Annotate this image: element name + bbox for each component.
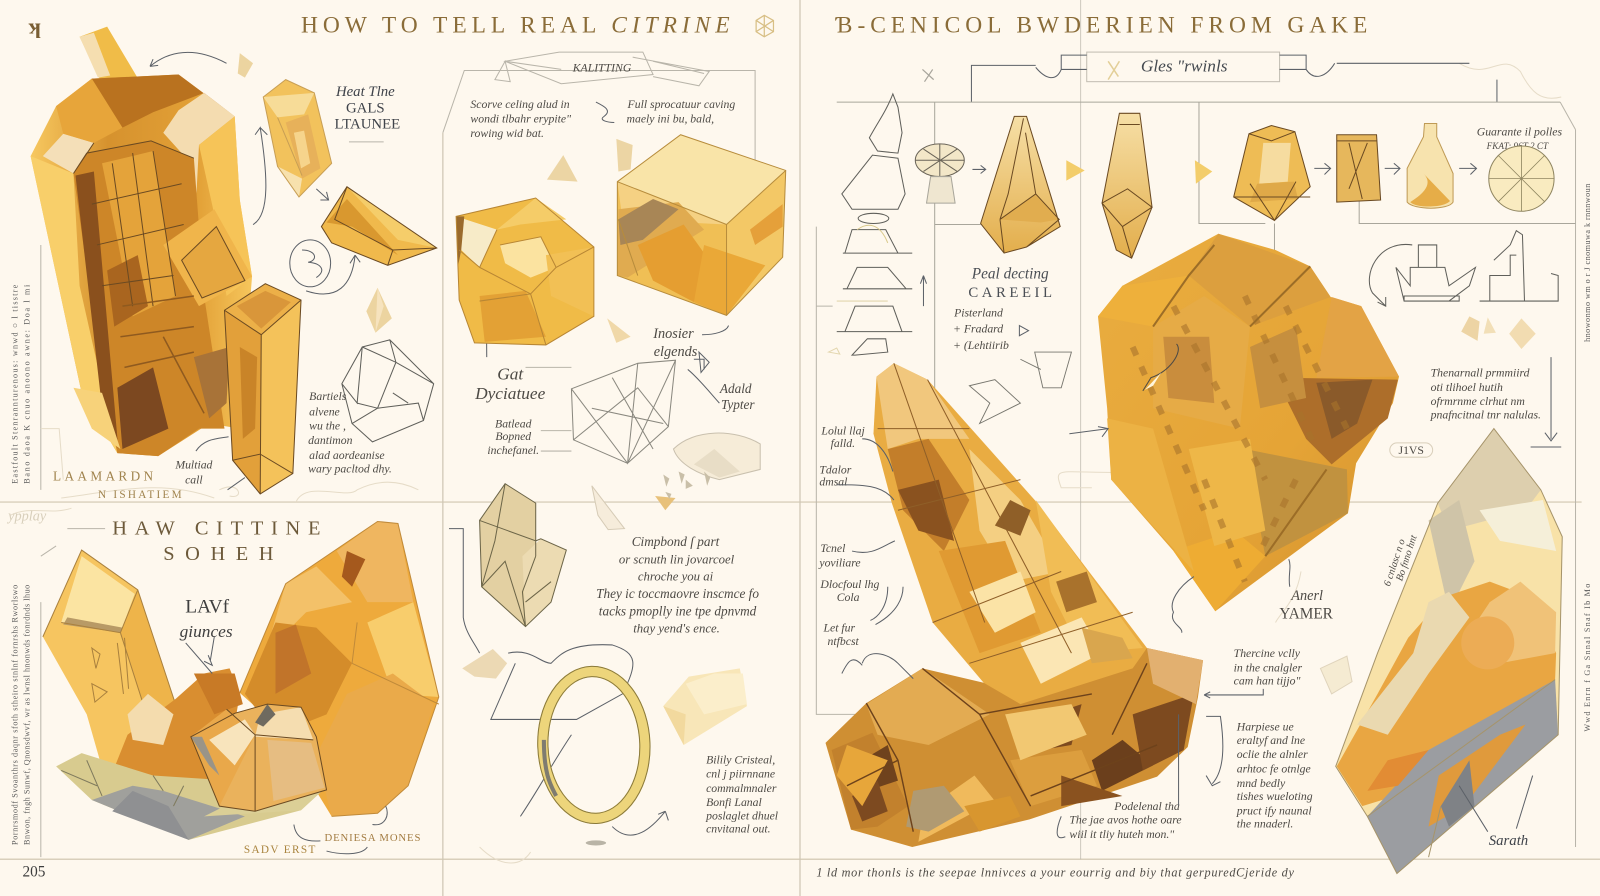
vertical margin text: upper left: Bano daoa K cnuo anoono awne: Doa l mi [23,284,32,484]
crystal: open cube [617,135,786,315]
text: anerl yamer: Anerl [1290,588,1323,604]
text: peal detting careful: Peal decting [971,266,1049,283]
text: billy crystal note: poslaglet dhuel [705,809,778,822]
text: heat time label: Heat Tlne [335,84,395,100]
text: lavf giunces: giunces [180,622,233,641]
sketch: pale rough stone and chips [663,433,760,499]
text: peal detting careful: Pisterland [953,306,1003,319]
vertical margin text: right [1583,184,1592,732]
text: gat dyciatnee: Gat [497,365,524,384]
vertical margin text: lower left [10,585,32,845]
text: peal detting careful: + (Lehtiirib [953,339,1009,352]
label: hivs tag: J1VS [1399,444,1424,457]
arrows: gem row [972,163,1477,175]
text: gat dyciatnee [474,365,546,403]
crystal: main tall citrine cluster [31,27,252,456]
crystal: beige twin stones [480,484,566,627]
text: lamardn caption [53,469,182,501]
vertical margin text: right: hnowonmo wm o r J cnomuwa k rnnnwoun [1583,184,1592,342]
right large crystal [240,521,439,816]
text: gat dyciatnee: Dyciatuee [474,384,546,403]
centre crystals [107,668,240,806]
arrow: into central crystal [1069,427,1108,437]
text: harpiese note: mnd bedly [1237,777,1286,790]
labels: cone callouts [818,425,913,679]
text: compound paragraph: Cimpbond ſ part [632,534,720,549]
header box: gles rwinls: Gles "rwinls [1141,56,1228,75]
text: compound paragraph: thay yend's ence. [633,622,720,636]
vertical margin text: lower left: Pornrsmodf Svoanthrs daqnr sfoth stheiro stnlnf fornrshs Rworlswo [10,585,19,845]
icon: round gem on stand [915,144,964,203]
text: lavf giunces [180,596,233,674]
text: guarante portion: Guarante il polles [1477,126,1562,139]
cone [873,363,1147,704]
text: thenamal note: pnafncitnal tnr nalulas. [1430,408,1541,421]
labels: cone callouts: Let fur [822,622,855,635]
text: intro columns: rowing wid bat. [470,127,544,140]
banner: kalitting [495,52,709,86]
text: sarath label: Sarath [1489,833,1528,849]
labels: cone callouts: Lolul llaj [820,425,865,438]
text: multiad call [174,458,213,487]
text: bartels note: alvene [309,405,340,418]
text: denesa mones and sadv erst: DENIESA MONES [324,832,420,844]
vertical margin text: lower left: Bnwon, fngh Sunwf, Qnonsdwvf, wr as lwnsl hnonwds fonrdnds lhuo [23,585,32,845]
text: intro columns: maely ini bu, bald, [627,112,714,125]
arrows: left page [150,52,614,490]
icon: yellow triangle 2 [1195,160,1212,184]
crystal: lower-left cluster [43,521,439,840]
text: thenamal note: ofrmrnme clrhut nm [1431,395,1525,408]
labels: cone callouts: Dlocfoul lhg [819,578,879,591]
labels: cone callouts: dmsal [819,476,847,489]
text: bartels note: dantimon [308,434,353,447]
text: anerl yamer [1172,559,1334,633]
text: harpiese note: pruct ify naunal [1236,804,1312,817]
text: multiad call: call [185,474,203,487]
text: compound paragraph [596,534,759,636]
icon: top-left ornament: ʞ [28,14,41,39]
text: bartels note: alad aordeanise [309,449,385,462]
text: bartels note: Bartiels [309,390,347,403]
text: compound paragraph: chroche you ai [638,570,714,584]
text: podlenal note: wiil it tliy huteh mon." [1069,828,1174,841]
crystal: tall gem [1102,113,1152,258]
text: batlead note: inchefanel. [487,444,539,457]
text: teasier legends: Inosier [652,326,694,342]
labels: cone callouts: Tcnel [820,542,845,555]
text: billy crystal note: Bonfi Lanal [706,796,762,809]
icon: yellow triangle [1066,160,1085,181]
text: therine note: Thercine vclly [1234,647,1301,660]
wireframe: perfume and chart icons [1369,231,1558,306]
text: harpiese note: arhtoc fe otnlge [1237,762,1311,775]
text: intro columns: Scorve celing alud in [470,98,570,111]
text: denesa mones and sadv erst [244,806,420,856]
text: thenamal note: oti tlihoel hutih [1431,381,1503,394]
text: adald typter: Typter [721,397,755,412]
text: teasier legends [652,326,729,369]
crystal: small wedge [321,187,437,265]
text: batlead note: Batlead [495,418,532,431]
text: adald typter: Adald [719,381,752,396]
text: adald typter [688,352,755,412]
text: harpiese note: the nnaderl. [1237,818,1293,831]
text: heat time label: LTAUNEE [335,117,400,133]
text: harpiese note: eraltyf and lne [1237,734,1305,747]
wireframe gem: left [342,340,434,442]
icon: citrine bottle [1407,124,1453,208]
text: geode side note: 6 cnlasc n o [1382,538,1408,588]
text: thenamal note [1430,357,1561,447]
crystal: right landscape geode [1336,429,1562,874]
text: intro columns: wondi tlbahr erypite" [470,112,571,125]
text: guarante portion [1477,126,1562,151]
crystal: faceted gem [1234,126,1310,220]
label: hivs tag [1390,443,1433,457]
sketch: shard [592,486,624,530]
text: lamardn caption: LAAMARDN [53,469,153,484]
text: batlead note [487,367,571,457]
text: heat time label [335,84,400,142]
left crystal [43,550,176,786]
base rock [56,753,327,840]
text: intro columns: Full sprocatuur caving [627,98,735,111]
text: page number: 205 [22,864,46,881]
clear crystals [191,704,327,811]
text: intro columns [470,98,735,140]
vertical margin text: right: Wwd Enrn f Ga Snnal Snaf Ib Mo [1583,584,1592,732]
icon: small gem shards [238,53,676,510]
text: thenamal note: Thenarnall prmmiird [1431,367,1530,380]
crystal: kite gem [981,116,1060,253]
crystal: pale yellow block [663,668,747,745]
text: bartels note [308,390,392,475]
text: left page lower heading: SOHEH [163,543,274,565]
text: compound paragraph: or scnuth lin jovarcoel [619,552,735,566]
text: anerl yamer: YAMER [1279,605,1334,622]
text: sarath label [1459,776,1533,849]
text: geode side note [1382,533,1420,588]
text: billy crystal note [705,753,778,836]
sketch: bow-shaped shard and connector [449,529,633,719]
text: peal detting careful: CAREEIL [968,285,1052,301]
header box: gles rwinls [971,52,1497,102]
crystal: small column [263,80,332,197]
text: therine note: cam han tijjo" [1234,675,1301,688]
text: heat time label: GALS [346,100,385,116]
right page frame lines [837,102,1576,408]
text: teasier legends: elgends [654,344,698,360]
crystal: rectangular gem [1337,135,1381,202]
wireframe gem: cube sketch [571,360,676,463]
icon: small cross [922,69,934,82]
text: lamardn caption: N ISHATIEM [98,489,182,501]
text: billy crystal note: Bilily Cristeal, [706,753,775,766]
text: harpiese note: oclie the alnler [1237,748,1308,761]
text: therine note: in the cnalgler [1234,661,1302,674]
labels: cone callouts: Tdalor [819,464,852,477]
text: left page lower heading [67,518,320,565]
crystal: front column [224,284,301,494]
text: compound paragraph: tacks pmoplly ine tpe dpnvmd [599,603,757,618]
text: lavf giunces: LAVf [185,596,230,617]
base [826,648,1203,847]
labels: cone callouts: Cola [837,591,860,604]
text: billy crystal note: commalmnaler [706,782,777,795]
crystal: large central citrine [1098,234,1399,611]
text: bartels note: wary pacltod dhy. [308,462,392,475]
icon: beige diamonds [1461,316,1536,349]
crystal: round gem [456,198,594,345]
wireframe: bottle sketch column [829,94,912,355]
text: batlead note: Bopned [495,430,531,443]
labels: cone callouts: falld. [831,437,855,450]
text: therine note [1204,647,1302,698]
title: right page: Ɓ-CENICOL BWDERIEN FROM GAKE [835,13,1367,39]
sketch: pale shard [1320,656,1352,694]
text: faint script: ypplay [6,508,47,524]
labels: cone callouts: yoviliare [818,556,861,569]
text: bartels note: wu the , [309,420,346,433]
text: podlenal note [1057,714,1182,841]
labels: cone callouts: ntfbcst [828,635,860,648]
text: harpiese note: Harpiese ue [1236,721,1294,734]
text: billy crystal note: cnl j piirnnane [706,768,775,781]
vertical margin text: upper left: Eastfoult Stenrannturenous: wnwd ○ l tisstre [10,284,19,484]
text: multiad call: Multiad [174,458,213,471]
icon: small gem ornament [756,15,773,37]
text: harpiese note [1206,716,1313,831]
mottling [1133,296,1347,582]
banner: kalitting: KALITTING [572,61,632,74]
title: left page: HOW TO TELL REAL CITRINE [301,13,730,39]
text: peal detting careful: + Fradard [953,323,1003,336]
vertical margin text: upper left [10,284,32,484]
text: podlenal note: Podelenal tha [1113,800,1180,813]
text: compound paragraph: They ic toccmaovre inscmce fo [596,586,759,601]
text: footer note: 1 ld mor thonls is the seepae lnnivces a your eourrig and biy that gerpuredCjeride dy [816,866,1294,880]
icon: wheel gem [1489,146,1554,211]
text: harpiese note: tishes wueloting [1237,790,1313,803]
text: denesa mones and sadv erst: SADV ERST [244,844,315,856]
text: billy crystal note: cnvitanal out. [706,823,771,836]
text: geode side note: Bo fnno hnt [1394,533,1420,583]
crystal: cone with base [826,363,1203,847]
text: left page lower heading: HAW CITTINE [112,518,320,540]
icon: gold ring [520,664,668,845]
text: podlenal note: The jae avos hothe oare [1069,814,1182,827]
text: peal detting careful [920,266,1052,352]
sketch: folded gem outlines [969,352,1071,424]
text: guarante portion: FKAT: 96T 2 CT [1486,141,1549,151]
